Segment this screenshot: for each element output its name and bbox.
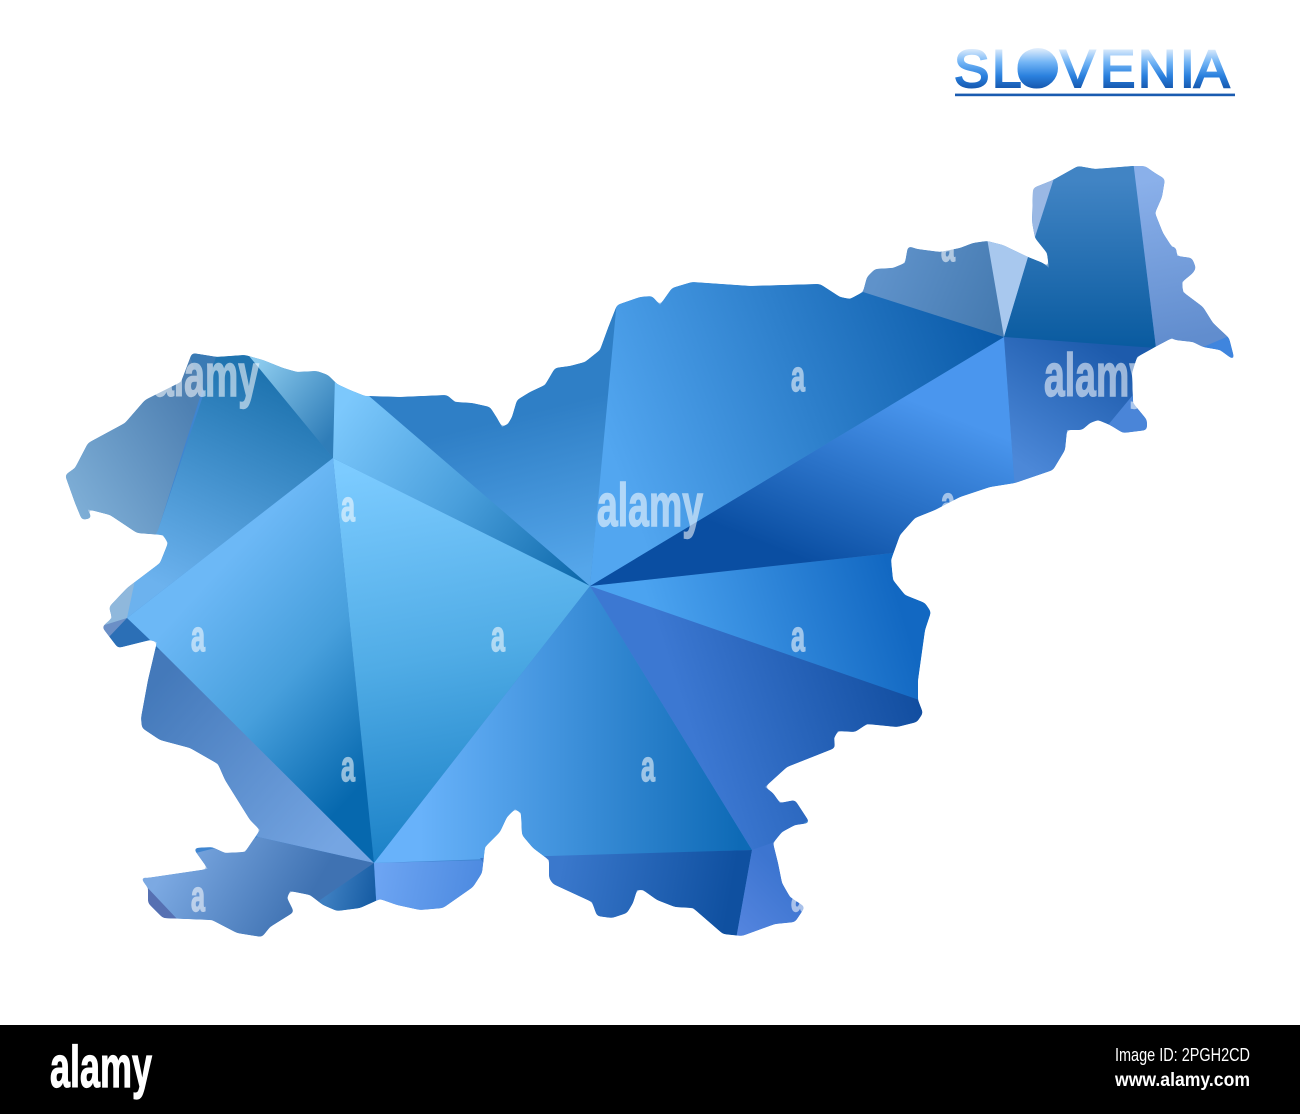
watermark: alamy on map: a [191, 612, 205, 661]
facet: north sliver [1032, 180, 1054, 240]
watermark: alamy on map: a [791, 352, 805, 401]
title: SLOVENIA: SLOVENIA [954, 40, 1230, 99]
facet: northwest top sliver [190, 354, 245, 392]
facet: northwest dull [66, 354, 213, 535]
facet: northwest main [100, 345, 333, 640]
watermark: alamy on map: a [641, 742, 655, 791]
facet: east [590, 553, 935, 702]
facet: east-northeast [590, 337, 1015, 586]
facet: southeast large [590, 586, 930, 850]
watermark: alamy on map: alamy [597, 472, 703, 539]
footer image id: Image ID: 2PGH2CD [1115, 1045, 1250, 1065]
facet: south coast light [374, 860, 490, 915]
facet: istria edge [148, 888, 176, 918]
facet: istria [142, 836, 374, 936]
facet: north centre [362, 290, 620, 586]
facet: northern triangle [247, 356, 336, 458]
watermark: alamy on map: a [791, 872, 805, 921]
facet: west tip grey [103, 618, 126, 640]
facet: lower northeast [1004, 337, 1156, 490]
footer band [0, 1025, 1300, 1114]
facet: south dark [480, 850, 752, 945]
facet: upper wedge [333, 375, 590, 586]
footer url: www.alamy.com [1114, 1070, 1250, 1091]
facet: centre west [333, 458, 590, 863]
watermark: alamy on map: a [791, 612, 805, 661]
watermark: alamy on map: alamy [153, 342, 259, 409]
facet: west tip dark [108, 618, 160, 655]
watermark: alamy on map [153, 222, 1150, 921]
facet: far northeast main [1004, 160, 1156, 362]
footer logo: alamy: alamy [50, 1035, 152, 1100]
facet: east tip [1202, 336, 1234, 358]
watermark: alamy on map: a [941, 478, 955, 527]
facet: southwest upper [120, 650, 374, 863]
watermark: alamy on map: a [491, 612, 505, 661]
map: Slovenia low-poly [40, 150, 1250, 950]
facet: west tip light [103, 582, 134, 630]
facet: northern strip [862, 241, 1004, 337]
facet: north-northeast [590, 275, 1004, 586]
watermark: alamy on map: a [941, 222, 955, 271]
facet: west large [127, 458, 374, 863]
watermark: alamy on map: a [341, 742, 355, 791]
facet: far east [1134, 166, 1231, 348]
watermark: alamy on map: alamy [1044, 342, 1150, 409]
facet: southeast small [734, 837, 804, 936]
facet: coastal dark [318, 863, 378, 911]
facet: bottom right tip [1106, 394, 1147, 433]
watermark: alamy on map: a [191, 872, 205, 921]
watermark: alamy on map: a [341, 482, 355, 531]
facet: pale sliver [987, 238, 1030, 337]
facet: south centre [374, 586, 752, 863]
